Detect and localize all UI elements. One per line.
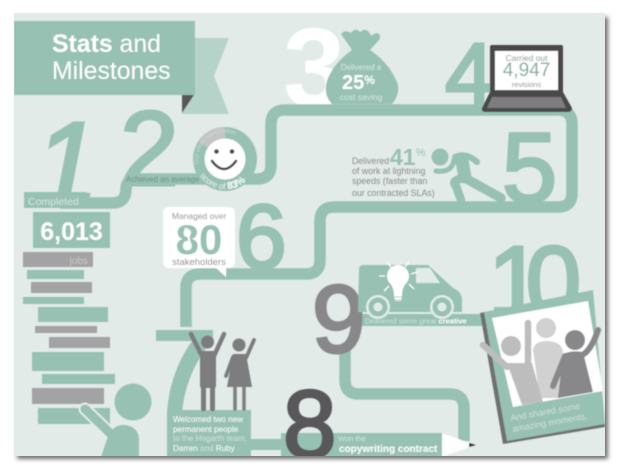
title banner: Milestones — [52, 58, 171, 85]
block: welcomed two new people: Welcomed two new — [173, 415, 243, 424]
icon: pencil tip — [442, 433, 476, 457]
digit 3: 3 — [283, 5, 345, 130]
digit 5: 5 — [502, 112, 557, 223]
speech bubble: 80 stakeholders: Managed over — [172, 211, 226, 221]
text: delivered 41%: speeds (faster than — [352, 176, 427, 186]
icon: laptop with revisions: revisions — [512, 80, 542, 89]
stat box 6,013 — [33, 212, 110, 248]
band: won copywriting contract — [281, 433, 443, 457]
smiley satisfaction ring — [192, 126, 258, 192]
icon: man with raised arms — [191, 334, 224, 409]
stack of jobs: jobs — [69, 256, 88, 267]
icon: money bag — [326, 30, 398, 104]
winding road — [60, 110, 572, 327]
icon: running person — [432, 148, 501, 200]
band: won copywriting contract: Won the — [338, 434, 366, 443]
smiley satisfaction ring: score of 83% — [200, 173, 246, 190]
text: delivered 41%: of work at lightning — [352, 166, 425, 176]
band: won copywriting contract: copywriting contract — [339, 444, 438, 455]
title banner — [14, 21, 229, 114]
icon: laptop with revisions — [482, 45, 572, 112]
speech bubble: 80 stakeholders: 80 — [176, 216, 222, 263]
digit 7 — [156, 330, 213, 412]
block: welcomed two new people: Darren and Ruby — [173, 444, 236, 453]
icon: delivery van with light bulb — [358, 262, 462, 319]
band: delivered creative — [362, 314, 484, 326]
digit 2: 2 — [120, 90, 179, 208]
stat box 6,013: 6,013 — [40, 218, 103, 246]
digit 4: 4 — [445, 25, 494, 124]
block: welcomed two new people — [167, 410, 251, 457]
block: welcomed two new people: to the Hogarth team, — [173, 434, 247, 443]
icon: money bag: cost saving — [340, 92, 383, 102]
label: achieved an average: Achieved an average — [126, 175, 199, 184]
digit 1: 1 — [34, 98, 99, 228]
icon: person reaching for stack — [85, 384, 152, 457]
smiley satisfaction ring: Our client satisfaction — [194, 129, 236, 164]
speech bubble: 80 stakeholders — [163, 207, 235, 277]
icon: laptop with revisions: 4,947 — [503, 60, 550, 81]
band: completed: Completed — [28, 196, 79, 208]
band: completed — [24, 192, 86, 208]
icon: woman with raised arm — [226, 338, 254, 409]
icon: money bag: % — [364, 73, 375, 87]
text: delivered 41%: % — [416, 147, 426, 159]
text: delivered 41%: Delivered — [352, 156, 389, 166]
road block 7 to 8 — [250, 438, 282, 450]
icon: money bag: 25 — [342, 72, 364, 94]
digit 6: 6 — [236, 187, 287, 288]
band: delivered creative: Delivered some great creative — [365, 316, 467, 326]
text: delivered 41% — [352, 144, 435, 198]
photo figures — [483, 318, 598, 405]
photo caption: And shared some — [510, 401, 581, 423]
digit 9: 9 — [312, 266, 365, 373]
photo frame: amazing moments — [480, 290, 605, 444]
speech bubble: 80 stakeholders: stakeholders — [172, 257, 226, 268]
road to pencil — [345, 345, 464, 441]
block: welcomed two new people: permanent people — [173, 425, 239, 434]
text: delivered 41%: our contracted SLAs) — [352, 188, 435, 198]
title banner: Stats and — [52, 31, 161, 58]
photo caption: amazing moments. — [512, 411, 588, 434]
icon: money bag: Delivered a — [341, 63, 382, 72]
digit 10: 10 — [488, 226, 578, 338]
icon: laptop with revisions: Carried out — [505, 53, 548, 63]
text: delivered 41%: 41 — [390, 144, 416, 170]
stack of jobs — [23, 252, 115, 424]
